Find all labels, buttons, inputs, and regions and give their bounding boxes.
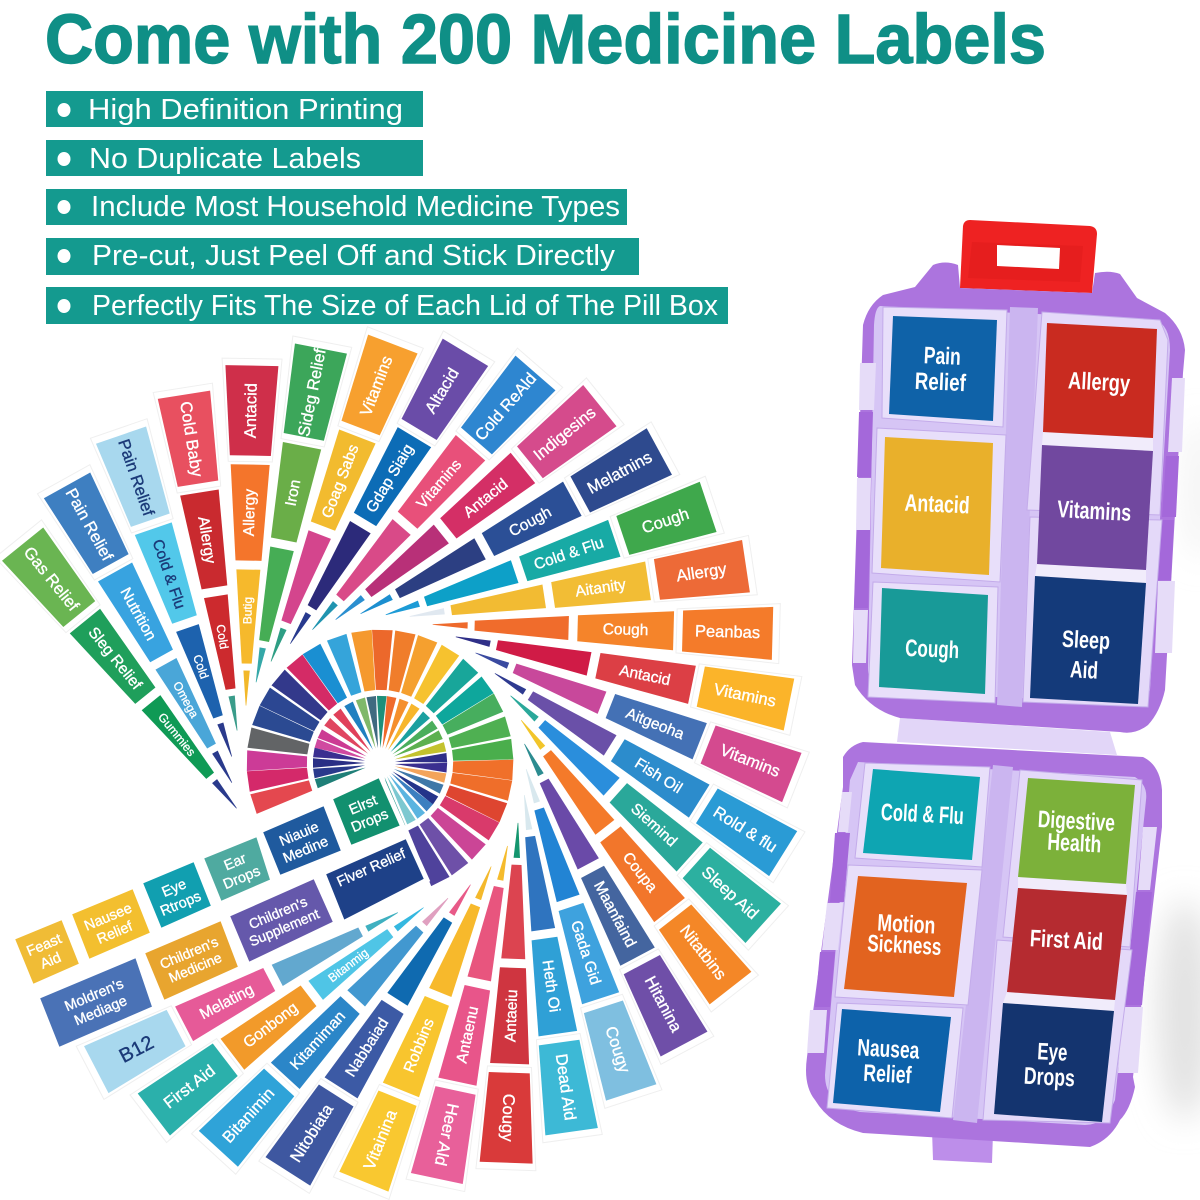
label: niauie medine: Niauie [277, 819, 321, 850]
label: eye drops [994, 1003, 1114, 1122]
label: elrst drops: Elrst [347, 793, 380, 819]
bullet: no duplicate labels [46, 140, 423, 176]
spoke: cold and flu blue: Rold & flu [710, 803, 780, 856]
hinge [897, 718, 1117, 755]
spoke: antacid red: Allergy [241, 489, 259, 536]
spoke: pain relief light [90, 419, 260, 766]
spoke: vitamins orange: Vitamins [357, 353, 396, 419]
label: elrst drops: Drops [349, 806, 391, 836]
spoke: vitamins yellow [450, 607, 802, 735]
spoke: cougy red: Antaeiu [502, 989, 521, 1042]
spoke: hitanina [498, 730, 714, 1064]
spoke: cougy red [476, 822, 548, 1171]
label: niauie medine [260, 803, 344, 878]
spoke: gas relief: Gummies [155, 710, 198, 759]
label: digestive health [1018, 778, 1135, 884]
spoke: allergy orange: Allergy [675, 560, 728, 585]
spoke: dead aid: Dead Aid [552, 1053, 579, 1122]
label: children's medicine: Medicine [166, 949, 224, 986]
spoke: sleep aid teal: Sleep Aid [698, 863, 762, 923]
spoke: cough green [376, 476, 724, 643]
spoke: peanbas: Peanbas [695, 622, 760, 642]
side clips [853, 363, 1185, 663]
lid: antacid: Antacid [904, 490, 970, 519]
spoke: bitanimin [192, 878, 470, 1174]
label: allergy [1043, 323, 1157, 438]
spoke: sleep aid teal: Siemind [627, 800, 680, 850]
spoke: b12 [76, 886, 412, 1099]
spoke: nitatbins [498, 702, 758, 1012]
label: eye drops: Drops [1023, 1063, 1076, 1092]
lid: nausea relief: Nausea [857, 1034, 921, 1065]
spoke: vitainina: Robbins [401, 1016, 438, 1075]
spoke: gas relief [0, 520, 260, 827]
case body [852, 262, 1185, 733]
label: eye drops: Rtrops [158, 889, 204, 920]
red handle [960, 220, 1097, 293]
row: first strip [12, 775, 403, 987]
spoke: cold relief blue: Vitamins [414, 456, 465, 512]
bullet: no duplicate labels: No Duplicate Labels [89, 143, 361, 175]
lid: pain relief [882, 307, 1007, 427]
central colour wheel [247, 630, 513, 886]
bullet: pre-cut peel and stick: Pre-cut, Just Peel Off and Stick Directly [92, 240, 616, 272]
label: sleep aid: Sleep [1061, 626, 1111, 655]
spoke: b12: B12 [116, 1032, 158, 1068]
spoke: dead aid: Heth Oi [539, 959, 563, 1013]
spoke: nitobiata [259, 868, 496, 1193]
lid: cold and flu: Cold & Flu [880, 799, 965, 830]
spoke: cough green: Cold & Flu [532, 534, 606, 574]
spoke: hitanina: Maanfaind [590, 879, 639, 950]
spoke: cougy light blue: Gada Gid [567, 919, 604, 987]
spoke: first aid teal: First Aid [160, 1062, 219, 1112]
spoke: b12: Melating [197, 981, 257, 1023]
spoke: cold and flu blue: Fish Oil [631, 755, 685, 797]
lid: pain relief: Relief [914, 368, 967, 397]
spoke: antacid red: Butig [240, 597, 255, 624]
inner ring sectors [313, 696, 447, 828]
label: digestive health: Health [1047, 829, 1102, 858]
bullet: include most household medicine types: Include Most Household Medicine Types [91, 191, 620, 223]
label: vitamins: Vitamins [1057, 496, 1132, 527]
label fan [0, 327, 809, 1199]
title: Come with 200 Medicine Labels [45, 0, 1046, 78]
spoke: bitanimin: Bitanimin [219, 1085, 278, 1147]
spoke: cough green: Cough [640, 505, 691, 537]
spoke: vitamins orange: Goag Sabs [319, 442, 363, 521]
spoke: antacid red [216, 358, 282, 706]
lid: motion sickness: Motion [877, 910, 936, 940]
spoke: vitamins orange [243, 327, 423, 672]
bullet: high definition printing: High Definition Printing [88, 94, 403, 126]
spoke: allergy orange [405, 535, 757, 646]
label: ear drops: Ear [222, 851, 249, 874]
spoke: sleep relief [227, 336, 352, 688]
label: feast aid [12, 917, 82, 987]
spoke: vitamins yellow: Antacid [618, 662, 672, 689]
spoke: nitatbins: Coupa [619, 849, 661, 896]
spoke: cold and flu blue [479, 648, 805, 883]
lid: nausea relief [827, 1003, 963, 1118]
spoke: allergy orange: Aitanity [574, 576, 627, 601]
label: vitamins [1037, 445, 1153, 570]
spoke: melatonins: Melatnins [584, 448, 655, 498]
centre channel [997, 307, 1038, 707]
label: eye drops [140, 859, 214, 931]
spoke: first aid teal: Bitanmig [325, 946, 371, 985]
label: allergy: Allergy [1067, 367, 1131, 398]
label: nausea relief: Nausee [82, 900, 134, 935]
spoke: cold baby: Allergy [194, 515, 219, 565]
spoke: pain relief light: Cold & Flu [149, 537, 188, 611]
spoke: hitanina: Hitanina [641, 973, 685, 1036]
spoke: cold relief blue [290, 348, 563, 649]
spoke: sleep aid teal [490, 673, 788, 950]
spoke: nitatbins: Nitatbins [676, 922, 730, 983]
spoke: nitobiata: Nabbaiad [342, 1015, 392, 1080]
label: moldren's mediage: Moldren's [62, 976, 126, 1015]
spoke: nitobiata: Nitobiata [287, 1100, 338, 1166]
bullet: perfectly fits the lid: Perfectly Fits The Size of Each Lid of The Pill Box [92, 290, 718, 322]
lid: motion sickness [835, 865, 982, 1005]
spoke: bitanimin: Kitamiman [287, 1008, 349, 1073]
inner tray [868, 306, 1170, 703]
label: moldren's mediage [37, 955, 155, 1050]
spoke: indigestion: Indigesins [530, 404, 599, 464]
label: first aid: First Aid [1029, 925, 1104, 956]
inner tray [825, 762, 1146, 1125]
label: nausea relief [69, 886, 153, 962]
label: feast aid: Aid [38, 950, 64, 973]
label: eye drops: Eye [1037, 1038, 1068, 1067]
spoke: indigestion [317, 378, 624, 643]
label: children's supplement: Children's [246, 893, 309, 932]
spoke: cougy red: Cougy [498, 1094, 518, 1143]
spoke: sleep relief: Sideg Relief [295, 347, 330, 438]
case body [806, 742, 1162, 1147]
spoke: heer aid: Antaenu [454, 1005, 482, 1065]
feature list [46, 91, 728, 324]
spoke: vitainina [333, 855, 519, 1199]
spoke: pain relief blue [37, 465, 258, 797]
label: children's supplement: Supplement [247, 905, 322, 949]
spoke: pain relief light: Cold [190, 653, 211, 681]
bottom tab [932, 1130, 993, 1163]
label: ear drops: Drops [221, 863, 263, 893]
spoke: peanbas: Cough [603, 621, 649, 639]
spoke: vitamins pink [464, 625, 809, 808]
label: children's medicine: Children's [157, 933, 220, 972]
spoke: cougy light blue: Cougy [601, 1024, 633, 1076]
spoke: melatonins: Cough [506, 504, 555, 540]
label: feast aid: Feast [24, 931, 64, 960]
side clips [807, 792, 1157, 1073]
label: flver relief: Flver Relief [335, 846, 409, 891]
lid: motion sickness: Sickness [867, 930, 942, 961]
spoke: pain relief blue: Omega [170, 679, 202, 721]
spoke: indigestion: Antacid [461, 476, 511, 521]
spoke: first aid teal: Gonbong [240, 999, 301, 1052]
spoke: vitamins pink: Vitamins [717, 741, 783, 781]
label: moldren's mediage: Mediage [72, 993, 130, 1029]
shadow: pill box [1157, 420, 1200, 1120]
label: children's supplement [227, 876, 336, 965]
lid: cough [868, 582, 998, 703]
spoke: vitamins pink: Aitgeoha [623, 705, 687, 743]
spoke: antacid purple: Gdap Siaig [363, 441, 417, 516]
pill box: top half [852, 220, 1185, 755]
spoke: melatonins [346, 422, 680, 640]
lid: right column top [1023, 312, 1168, 707]
bullet: high definition printing [46, 91, 423, 127]
row: children's supplement strip [37, 836, 427, 1050]
spoke: first aid teal [130, 884, 442, 1143]
spoke: dead aid [495, 791, 602, 1143]
spoke: sleep relief: Iron [282, 478, 304, 508]
spoke: vitamins yellow: Vitamins [712, 680, 778, 711]
label: digestive health: Digestive [1037, 806, 1116, 837]
centre channel [953, 765, 1013, 1123]
lid: cold and flu [855, 763, 990, 867]
spoke: vitainina: Vitainina [361, 1107, 401, 1173]
spoke: cold baby [153, 383, 267, 735]
lid: right column bottom [983, 770, 1142, 1123]
lid: nausea relief: Relief [863, 1060, 913, 1089]
spoke: cold relief blue: Cold ReAld [472, 370, 540, 444]
label: flver relief [323, 836, 427, 923]
lid: cough: Cough [905, 635, 960, 664]
spoke: cold baby: Cold [213, 623, 231, 650]
spoke: pain relief blue: Nutrition [116, 585, 159, 644]
label: eye drops: Eye [160, 876, 189, 901]
spoke: peanbas [432, 594, 780, 664]
lid: pain relief: Pain [923, 342, 961, 371]
label: elrst drops [330, 775, 403, 848]
spoke: gas relief: Sleg Relief [85, 624, 145, 694]
label: nausea relief: Relief [95, 918, 136, 948]
label: sleep aid: Aid [1069, 656, 1099, 685]
spoke: antacid purple: Altacid [422, 365, 463, 417]
spoke: antacid red: Antacid [242, 383, 261, 438]
pill box: bottom half [806, 742, 1162, 1163]
lid: antacid [872, 428, 1006, 582]
spoke: heer aid [406, 840, 537, 1192]
label: sleep aid [1030, 576, 1146, 704]
spoke: cold baby: Cold Baby [176, 400, 206, 479]
label: ear drops [201, 834, 273, 904]
spoke: pain relief light: Pain Relief [114, 437, 157, 519]
outer ring sectors [247, 630, 513, 886]
label: niauie medine: Medine [281, 834, 331, 867]
spoke: heer aid: Heer Ald [431, 1102, 462, 1167]
spoke: antacid purple [265, 331, 495, 659]
spoke: pain relief blue: Pain Relief [62, 485, 116, 564]
label: first aid [1007, 888, 1127, 1000]
spoke: cougy light blue [498, 760, 662, 1108]
spoke: gas relief: Gas Relief [20, 544, 82, 615]
label: children's medicine [142, 918, 241, 1003]
